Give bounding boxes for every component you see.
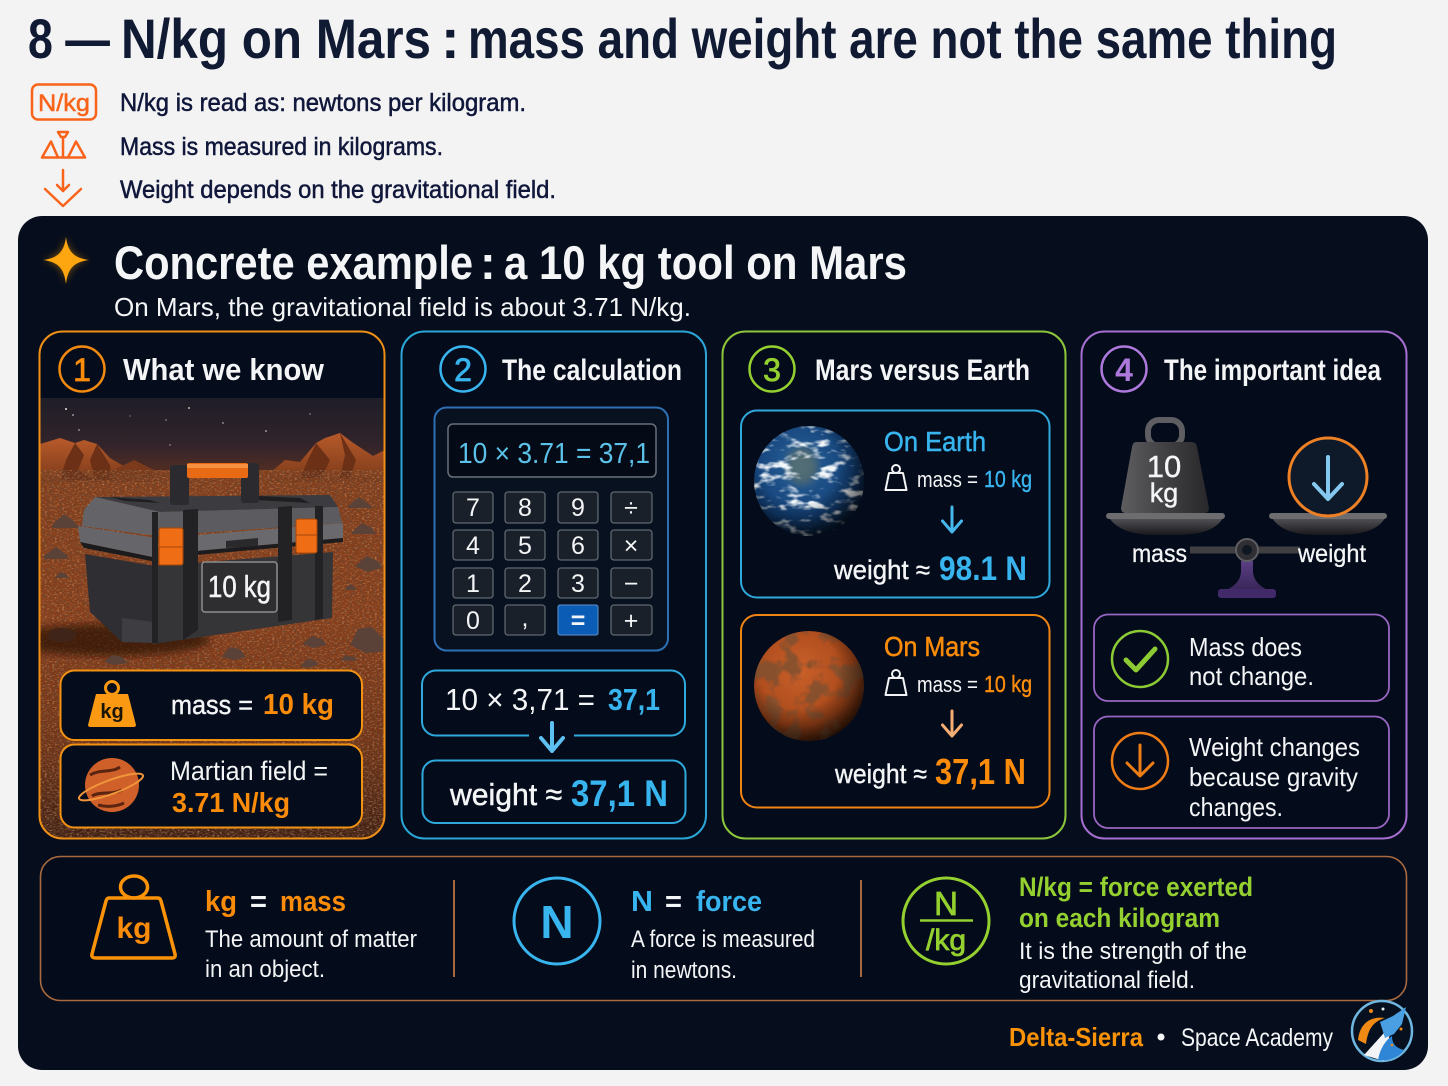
icon: mass weight outline [886, 670, 906, 695]
footer credit: Space Academy [1181, 1024, 1333, 1052]
dark main panel [18, 216, 1428, 1070]
calculator keypad: 4 [466, 532, 480, 560]
key point: weight: Weight depends on the gravitational field. [120, 176, 556, 204]
illustration: toolbox on Mars [10, 398, 386, 840]
Mars card: 10 kg [984, 671, 1032, 697]
result box [422, 760, 686, 823]
definitions strip [40, 856, 1406, 1000]
definition: N/kg [903, 872, 1253, 994]
panel 3 heading: Mars versus Earth [815, 354, 1030, 387]
iron weight 10 kg: kg [1150, 478, 1178, 508]
icon: kg weight outline: kg [116, 912, 152, 945]
icon: N/kg tag: N/kg [38, 90, 90, 117]
definition: N: in newtons. [631, 957, 737, 984]
definition: kg: mass [280, 886, 346, 918]
Earth card: weight ≈ [833, 555, 930, 585]
Martian field card [60, 744, 362, 828]
Earth card: 10 kg [984, 466, 1032, 492]
section subheading: On Mars, the gravitational field is about 3.71 N/kg. [114, 292, 691, 322]
arrow: Earth down [942, 507, 962, 532]
iron weight 10 kg [1121, 420, 1209, 513]
definition: N/kg: gravitational field. [1019, 967, 1195, 994]
definition: kg: in an object. [205, 956, 325, 983]
number badge 3: 3 [763, 352, 781, 388]
icon: N per kg circle [903, 878, 989, 964]
definition: N/kg: It is the strength of the [1019, 938, 1247, 965]
title: : [441, 7, 460, 70]
definition: N: = [665, 886, 682, 918]
illustration: Mars [754, 631, 864, 741]
panel 4 heading: The important idea [1164, 354, 1381, 387]
right pan [1269, 513, 1387, 535]
panel 1 frame [40, 332, 384, 838]
definition: kg: = [250, 886, 267, 918]
Earth card: mass = [917, 467, 978, 492]
Earth card: 98.1 N [939, 550, 1027, 588]
icon: kg weight [88, 682, 136, 727]
calculator display: 10 × 3.71 = 37,1 [458, 438, 650, 470]
iron weight 10 kg: 10 [1147, 449, 1181, 484]
icon: kg weight: kg [100, 701, 124, 723]
calculator keypad: 8 [518, 494, 532, 522]
calculator keypad: − [624, 570, 638, 598]
mass card [60, 670, 362, 740]
icon: N circle: N [540, 896, 574, 948]
icon: N/kg tag [32, 84, 96, 120]
calculator display [448, 424, 656, 477]
calculator keypad: + [624, 607, 638, 635]
note: weight changes: changes. [1189, 792, 1283, 822]
footer credit [1009, 1001, 1412, 1061]
icon: N circle [514, 878, 600, 964]
Martian field card: Martian field = [170, 756, 328, 786]
calculator keypad: = [571, 607, 585, 635]
note: weight changes: Weight changes [1189, 732, 1360, 762]
equation box: 10 × 3,71 = [445, 682, 595, 717]
calculator [434, 408, 668, 650]
Earth card: On Earth [884, 426, 986, 457]
definition: kg: The amount of matter [205, 926, 417, 953]
toolbox latches [159, 519, 317, 565]
calculator keypad: 5 [518, 532, 532, 560]
toolbox label plate: 10 kg [208, 569, 271, 604]
number badge 2: 2 [454, 352, 472, 388]
icon: gold star [43, 237, 89, 284]
illustration: balance scale: mass [1132, 540, 1187, 568]
icon: down arrow [45, 170, 81, 206]
section heading: : [480, 236, 496, 289]
definition: N/kg: N/kg = force exerted [1019, 872, 1253, 902]
key point: N/kg reading [32, 84, 526, 120]
left pan [1106, 513, 1225, 535]
Mars card: 37,1 N [935, 751, 1026, 792]
section heading: Concrete example [114, 236, 473, 289]
definition: N: A force is measured [631, 926, 815, 953]
number badge 1 [60, 346, 104, 392]
toolbox handle [170, 463, 259, 505]
definition: N/kg: on each kilogram [1019, 903, 1220, 933]
footer credit: Delta-Sierra [1009, 1022, 1143, 1052]
definition: N: force [696, 886, 762, 918]
mass card: 10 kg [263, 689, 334, 721]
icon: balance [42, 132, 85, 158]
Mars card: On Mars [884, 631, 980, 662]
Mars card [741, 615, 1050, 808]
panel 4: the important idea [1082, 332, 1406, 838]
note: mass does not change: not change. [1189, 661, 1314, 691]
mass card: mass = [171, 690, 253, 720]
weight force circle [1289, 438, 1367, 516]
Martian field card: 3.71 N/kg [172, 787, 290, 818]
panel 1 heading: What we know [123, 352, 325, 387]
key point: mass: Mass is measured in kilograms. [120, 133, 443, 161]
number badge 2 [440, 346, 486, 392]
icon: N per kg circle: /kg [926, 924, 966, 957]
calculator keypad: ÷ [624, 494, 638, 522]
calculator keypad: 3 [571, 570, 585, 598]
calculator keypad: 0 [466, 607, 480, 635]
section heading [114, 236, 907, 289]
calculator keypad: 6 [571, 532, 585, 560]
definition: N: N [631, 886, 653, 918]
arrow: to result [541, 723, 563, 751]
calculator keypad: , [522, 604, 528, 632]
panel 3: Mars versus Earth [722, 332, 1066, 838]
icon: mass weight outline [886, 465, 906, 490]
title [28, 7, 1337, 70]
note: weight changes [1094, 716, 1389, 828]
panel 2: the calculation [402, 332, 706, 838]
definition: kg: kg [205, 886, 237, 918]
number badge 3 [750, 346, 794, 392]
key point: N/kg reading: N/kg is read as: newtons per kilogram. [120, 89, 526, 117]
calculator keypad: × [624, 532, 638, 560]
panel 2 heading: The calculation [502, 354, 682, 387]
arrow: Mars down [942, 711, 962, 736]
key point: weight [45, 170, 556, 206]
toolbox label plate [202, 562, 277, 612]
Earth card [741, 410, 1050, 598]
calculator keypad: 9 [571, 494, 585, 522]
panel 1: what we know [10, 332, 386, 840]
logo: rocket badge [1352, 1001, 1412, 1061]
icon: N per kg circle: N [934, 885, 958, 922]
equation box [422, 670, 685, 736]
equation box: 37,1 [608, 682, 660, 717]
number badge 4: 4 [1115, 352, 1133, 388]
toolbox body [78, 463, 343, 644]
calculator keypad: 2 [518, 570, 532, 598]
title: 8 — [28, 7, 110, 70]
definition: N [514, 878, 815, 984]
icon: kg weight outline [92, 876, 175, 958]
icon: orange down arrow [1112, 733, 1168, 789]
Mars card: mass = [917, 672, 978, 697]
definition: kg [92, 876, 417, 983]
calculator keypad: 1 [466, 570, 480, 598]
number badge 1: 1 [73, 352, 91, 388]
title: N/kg on Mars [121, 7, 431, 70]
result box: 37,1 N [571, 773, 668, 814]
calculator keypad [453, 492, 652, 635]
Mars card: weight ≈ [834, 759, 927, 789]
section heading: a 10 kg tool on Mars [504, 236, 907, 289]
icon: green check [1112, 631, 1168, 687]
illustration: Earth [754, 426, 864, 536]
illustration: balance scale [1106, 420, 1387, 598]
icon: ringed planet [77, 758, 145, 812]
illustration: balance scale: weight [1297, 540, 1366, 568]
note: mass does not change: Mass does [1189, 632, 1302, 662]
number badge 4 [1102, 346, 1146, 392]
result box: weight ≈ [449, 777, 562, 812]
note: mass does not change [1094, 614, 1389, 701]
note: weight changes: because gravity [1189, 762, 1358, 792]
calculator keypad: 7 [466, 494, 480, 522]
